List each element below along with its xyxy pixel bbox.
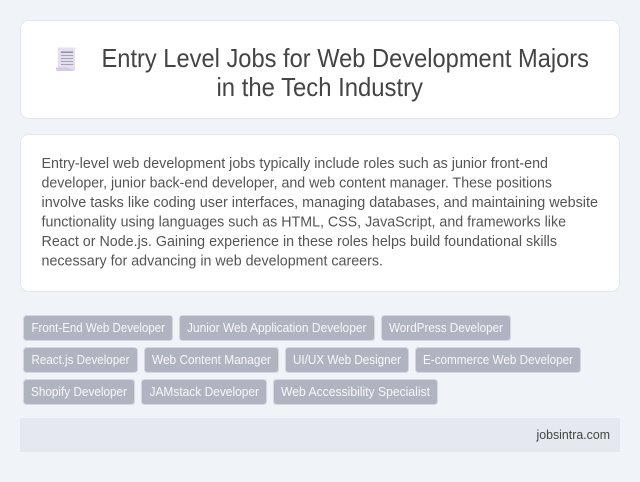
- tag: WordPress Developer: WordPress Developer: [389, 320, 504, 335]
- tag: E-commerce Web Developer: [416, 348, 580, 372]
- description text: necessary for advancing in web development careers.: [42, 252, 383, 270]
- icon: paper receipt scroll: [56, 48, 75, 71]
- tag: UI/UX Web Designer: [286, 348, 408, 372]
- job tags: [24, 316, 580, 404]
- tag: JAMstack Developer: JAMstack Developer: [150, 384, 260, 399]
- description text: React or Node.js. Gaining experience in these roles helps build foundational skills: [42, 233, 557, 250]
- tag: Web Accessibility Specialist: Web Accessibility Specialist: [281, 384, 430, 399]
- description text: Entry-level web development jobs typically include roles such as junior front-end: [42, 155, 548, 172]
- tag: Front-End Web Developer: Front-End Web Developer: [32, 320, 166, 335]
- header panel: [20, 20, 620, 118]
- tag: JAMstack Developer: [142, 380, 266, 404]
- title: [102, 43, 589, 102]
- description text: involve tasks like coding user interfaces, managing databases, and maintaining website: [42, 194, 598, 211]
- tag: Web Content Manager: [144, 348, 278, 372]
- tag: E-commerce Web Developer: E-commerce Web Developer: [423, 352, 574, 367]
- tag: WordPress Developer: [382, 316, 510, 340]
- tag: React.js Developer: React.js Developer: [32, 352, 130, 367]
- description text: [42, 155, 598, 270]
- title: in the Tech Industry: [216, 72, 423, 102]
- footer source text: jobsintra.com: [536, 427, 610, 442]
- description text: functionality using languages such as HTML, CSS, JavaScript, and frameworks like: [42, 214, 566, 230]
- tag: React.js Developer: [24, 348, 138, 372]
- tag: UI/UX Web Designer: UI/UX Web Designer: [293, 352, 402, 367]
- tag: Front-End Web Developer: [24, 316, 172, 340]
- tag: Web Accessibility Specialist: [274, 380, 438, 404]
- description panel: [20, 134, 620, 292]
- description text: developer, junior back-end developer, and web content manager. These positions: [42, 174, 552, 192]
- footer bar: [20, 418, 620, 452]
- tag: Junior Web Application Developer: [180, 316, 374, 340]
- tag: Shopify Developer: Shopify Developer: [31, 384, 128, 399]
- tag: Shopify Developer: [24, 380, 134, 404]
- tag: Web Content Manager: Web Content Manager: [152, 352, 272, 367]
- tag: Junior Web Application Developer: Junior Web Application Developer: [187, 320, 367, 335]
- title: Entry Level Jobs for Web Development Majors: [102, 43, 589, 73]
